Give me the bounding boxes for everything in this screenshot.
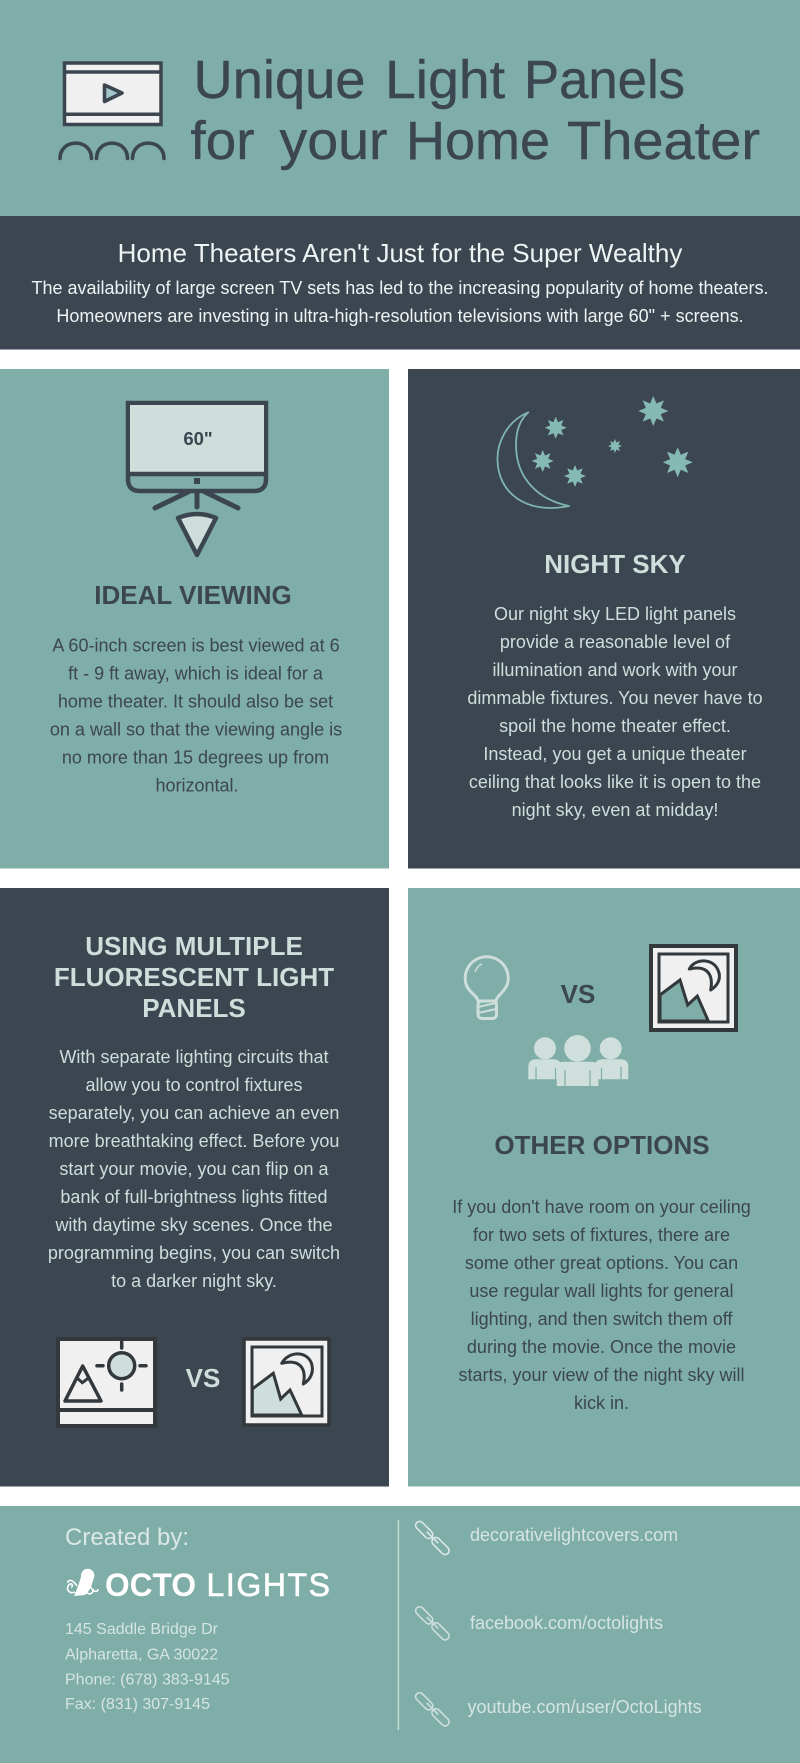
body text: use regular wall lights for general <box>469 1281 734 1301</box>
heading: USING MULTIPLE <box>85 931 303 961</box>
body text: A 60-inch screen is best viewed at 6 <box>52 636 340 656</box>
link: website <box>414 1520 678 1556</box>
body text: Instead, you get a unique theater <box>483 744 747 764</box>
address: Fax: (831) 307-9145 <box>65 1696 210 1713</box>
body text <box>48 1047 340 1291</box>
panel: other options <box>408 888 800 1486</box>
body text: If you don't have room on your ceiling <box>452 1197 751 1217</box>
intro text <box>31 278 769 326</box>
heading: PANELS <box>142 993 246 1023</box>
link: facebook <box>414 1605 663 1642</box>
title: Unique <box>194 50 366 110</box>
body text: more breathtaking effect. Before you <box>49 1131 339 1151</box>
body text: some other great options. You can <box>465 1253 738 1273</box>
intro text: The availability of large screen TV sets has led to the increasing popularity of home theaters. <box>31 278 769 298</box>
link: website: decorativelightcovers.com <box>470 1525 678 1545</box>
logo: Octo Lights: OCTO <box>105 1567 196 1603</box>
icon: chain link <box>414 1520 451 1556</box>
body text: for two sets of fixtures, there are <box>473 1225 730 1245</box>
body text: with daytime sky scenes. Once the <box>54 1215 333 1235</box>
link: youtube: youtube.com/user/OctoLights <box>468 1697 702 1717</box>
panel: night sky <box>408 369 800 868</box>
intro heading: Home Theaters Aren't Just for the Super Wealthy <box>118 238 682 268</box>
address <box>65 1621 230 1713</box>
logo: Octo Lights <box>68 1567 330 1603</box>
address: 145 Saddle Bridge Dr <box>65 1621 219 1638</box>
panel: header <box>0 0 800 216</box>
body text: spoil the home theater effect. <box>499 716 731 736</box>
title: Home <box>406 111 550 171</box>
panel: using multiple fluorescent light panels <box>0 888 389 1486</box>
body text: programming begins, you can switch <box>48 1243 340 1263</box>
body text: provide a reasonable level of <box>500 632 731 652</box>
body text: lighting, and then switch them off <box>471 1309 733 1329</box>
body text: dimmable fixtures. You never have to <box>467 688 763 708</box>
heading: FLUORESCENT LIGHT <box>54 962 334 992</box>
link: facebook: facebook.com/octolights <box>470 1613 663 1633</box>
icon: octopus <box>68 1569 98 1596</box>
icon: television with viewing cone <box>128 403 266 555</box>
body text: bank of full-brightness lights fitted <box>60 1187 328 1207</box>
link: youtube <box>414 1691 702 1728</box>
icon: moon and stars <box>497 396 693 508</box>
heading <box>54 931 334 1023</box>
vs label: VS <box>561 979 595 1009</box>
heading: NIGHT SKY <box>544 549 686 579</box>
icon: people <box>528 1035 628 1086</box>
address: Phone: (678) 383-9145 <box>65 1672 230 1688</box>
title: your <box>280 111 388 171</box>
icon: cinema screen and seats <box>60 63 164 158</box>
icon: light bulb <box>465 957 508 1018</box>
body text: horizontal. <box>155 776 239 796</box>
body text: to a darker night sky. <box>111 1271 277 1291</box>
body text: kick in. <box>574 1393 629 1413</box>
panel: ideal viewing <box>0 369 389 868</box>
body text: on a wall so that the viewing angle is <box>50 720 342 740</box>
body text: start your movie, you can flip on a <box>59 1159 330 1179</box>
logo: Octo Lights: LIGHTS <box>206 1567 330 1603</box>
icon: night sky panel <box>244 1339 329 1425</box>
icon: daytime sky panel <box>58 1339 155 1426</box>
title: Theater <box>567 111 760 171</box>
body text: separately, you can achieve an even <box>49 1103 339 1123</box>
icon: chain link <box>414 1605 451 1642</box>
body text: ceiling that looks like it is open to the <box>469 772 761 792</box>
panel: footer <box>0 1506 800 1763</box>
panel: intro <box>0 216 800 350</box>
address: Alpharetta, GA 30022 <box>65 1646 218 1664</box>
body text <box>467 604 763 820</box>
created by label: Created by: <box>65 1524 189 1551</box>
body text: home theater. It should also be set <box>58 692 333 712</box>
title: Light <box>385 50 505 110</box>
heading: OTHER OPTIONS <box>494 1130 710 1160</box>
body text: during the movie. Once the movie <box>467 1337 736 1357</box>
body text: no more than 15 degrees up from <box>62 748 329 768</box>
intro text: Homeowners are investing in ultra-high-resolution televisions with large 60" + screens. <box>56 306 744 326</box>
body text: illumination and work with your <box>492 660 738 680</box>
icon: television with viewing cone: 60" <box>183 428 213 449</box>
body text: With separate lighting circuits that <box>59 1047 329 1067</box>
body text <box>452 1197 751 1413</box>
icon: night sky panel <box>651 946 736 1030</box>
heading: IDEAL VIEWING <box>94 580 292 610</box>
body text: night sky, even at midday! <box>512 800 718 820</box>
body text <box>50 636 342 796</box>
title <box>190 50 760 171</box>
vs label: VS <box>186 1363 220 1393</box>
body text: ft - 9 ft away, which is ideal for a <box>68 664 324 684</box>
body text: allow you to control fixtures <box>85 1075 303 1095</box>
body text: Our night sky LED light panels <box>494 604 736 624</box>
title: for <box>190 111 255 171</box>
body text: starts, your view of the night sky will <box>458 1365 745 1385</box>
title: Panels <box>524 50 685 110</box>
icon: chain link <box>414 1691 451 1728</box>
